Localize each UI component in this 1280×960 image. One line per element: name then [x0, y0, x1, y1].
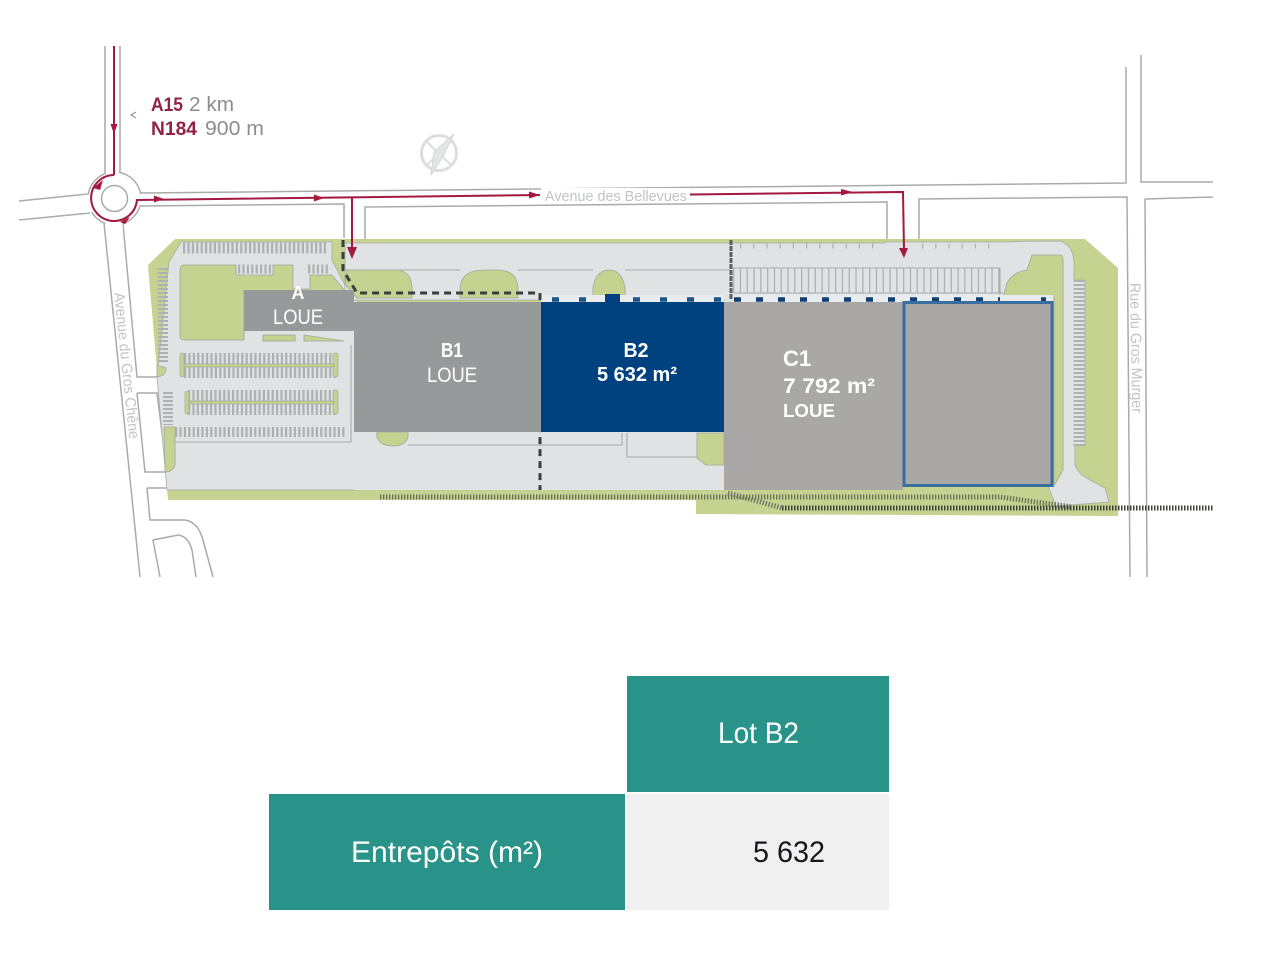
loading dock markers — [541, 295, 1053, 302]
icon: compass — [422, 134, 456, 175]
table value: 5 632: 5 632 — [753, 836, 825, 869]
building A — [244, 283, 354, 331]
table row label: Entrepôts — [269, 794, 625, 910]
parking islands — [180, 353, 338, 414]
distance note: 900 m — [205, 118, 264, 140]
access route arrows — [91, 46, 908, 259]
building B1: LOUE — [427, 364, 477, 387]
building B2 highlighted: 5 632 m² — [597, 364, 677, 386]
building B2 highlighted — [541, 302, 724, 432]
street label: Avenue du Gros Chêne: Avenue du Gros Chêne — [110, 292, 142, 440]
street label: Rue du Gros Murger: Rue du Gros Murger — [1126, 283, 1145, 413]
street label: Avenue des Bellevues: Avenue des Bellevues — [545, 188, 687, 205]
building C1 — [724, 302, 903, 490]
distance note — [131, 94, 264, 140]
table row label: Entrepôts: Entrepôts (m²) — [351, 836, 543, 869]
paved areas — [157, 241, 1109, 506]
table header: Lot B2: Lot B2 — [718, 717, 799, 750]
distance note: A15 — [151, 95, 183, 116]
distance note: N184 — [151, 119, 197, 140]
road junction openings — [84, 165, 146, 229]
parking bays — [163, 246, 1079, 446]
building B1 — [354, 302, 541, 432]
building C2 outlined — [904, 302, 1052, 486]
boundary dashed lines — [343, 240, 731, 490]
road network — [19, 46, 1213, 577]
site green area — [148, 239, 1118, 516]
distance note: 2 km — [189, 94, 234, 116]
building C1: LOUE — [783, 401, 835, 421]
building A: LOUE — [273, 306, 323, 329]
building B1: B1 — [441, 340, 463, 362]
building C1: C1 — [783, 346, 811, 371]
service yard outlines — [175, 268, 1003, 457]
green planting beds — [157, 255, 1063, 486]
building A: A — [292, 283, 304, 303]
table value: 5 632 — [627, 794, 889, 910]
table header: Lot B2 — [627, 676, 889, 792]
building C1: 7 792 m² — [783, 375, 875, 398]
railway tracks — [380, 493, 1213, 508]
building B2 highlighted: B2 — [624, 340, 648, 362]
